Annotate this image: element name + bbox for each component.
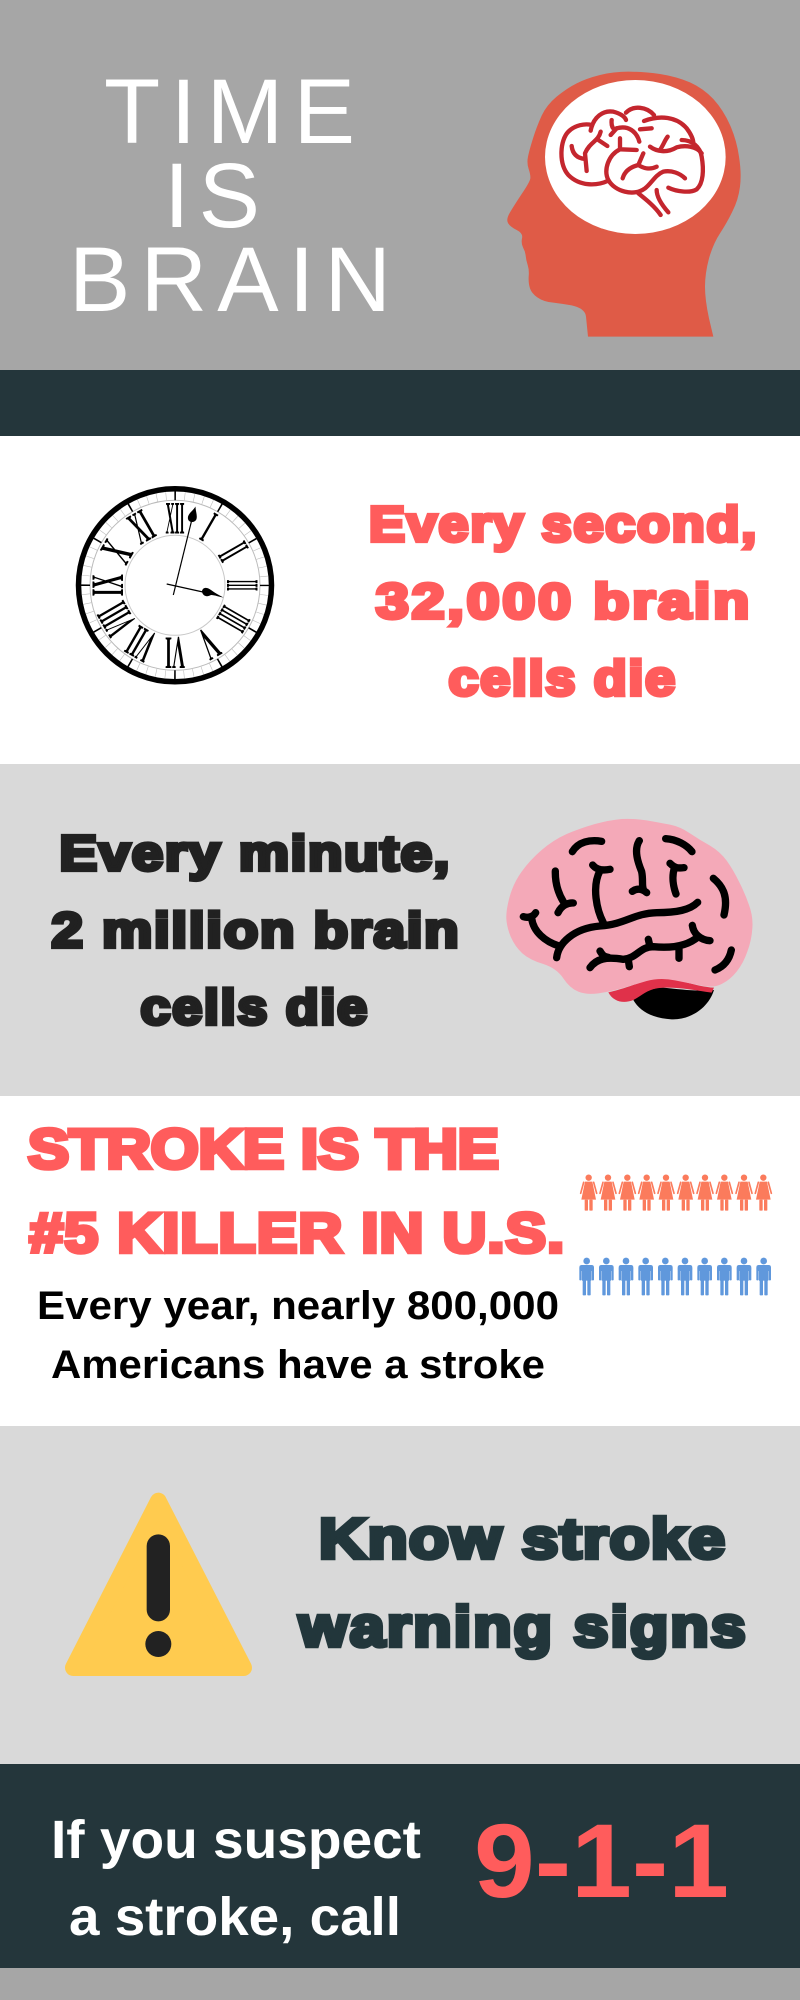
icon: roman numeral clock: XI: [120, 500, 163, 555]
text: if you suspect: a stroke, call: [69, 1887, 401, 1947]
title: BRAIN: [69, 229, 391, 331]
text: every second: [369, 496, 756, 705]
text: every minute: 2 million brain: [52, 903, 459, 958]
title: IS: [164, 145, 260, 247]
icon: roman numeral clock: [78, 489, 272, 682]
icon: roman numeral clock: VI: [165, 626, 185, 678]
icon: roman numeral clock: X: [90, 532, 144, 572]
text: every year: Every year, nearly 800,000: [37, 1284, 559, 1328]
title: [69, 61, 391, 331]
text: every second: 32,000 brain: [376, 575, 749, 629]
icon: roman numeral clock: XII: [166, 492, 184, 544]
icon: roman numeral clock: I: [193, 503, 224, 551]
text: every second: Every second,: [369, 496, 756, 551]
text: know stroke warning signs: [298, 1507, 746, 1658]
text: every minute: cells die: [140, 979, 367, 1034]
icon: roman numeral clock: IIII: [206, 598, 260, 639]
panel: every minute: [0, 764, 800, 1096]
text: if you suspect: If you suspect: [51, 1810, 421, 1870]
panel: every second: [0, 436, 800, 764]
panel: dark band: [0, 370, 800, 436]
text: every year: [37, 1284, 559, 1387]
heading: stroke killer: [28, 1119, 564, 1264]
icon: pink brain: [506, 819, 753, 1019]
icon: warning triangle: [73, 1501, 244, 1668]
icon: roman numeral clock: II: [208, 534, 258, 569]
text: every year: Americans have a stroke: [51, 1343, 545, 1387]
callout: 9-1-1: 9-1-1: [474, 1803, 729, 1920]
heading: stroke killer: #5 KILLER IN U.S.: [30, 1202, 564, 1264]
text: know stroke warning signs: warning signs: [298, 1595, 746, 1658]
panel: warning signs: [0, 1426, 800, 1764]
text: know stroke warning signs: Know stroke: [319, 1507, 725, 1571]
panel: call 911 footer: [0, 1764, 800, 1968]
icon: head with brain: [507, 72, 741, 337]
text: every second: cells die: [448, 650, 675, 705]
panel: bottom strip: [0, 1968, 800, 2000]
heading: stroke killer: STROKE IS THE: [28, 1119, 499, 1180]
icon: roman numeral clock: V: [189, 617, 228, 670]
icon: roman numeral clock: IX: [82, 574, 134, 596]
panel: title header: [0, 0, 800, 370]
icon: roman numeral clock: VIII: [87, 594, 146, 644]
text: every minute: [52, 826, 459, 1034]
title: TIME: [104, 61, 355, 163]
icon: row of men: [579, 1258, 771, 1295]
text: if you suspect: [51, 1810, 421, 1947]
icon: roman numeral clock: III: [216, 580, 268, 591]
icon: row of women: [581, 1174, 771, 1211]
text: every minute: Every minute,: [60, 826, 449, 881]
panel: stroke is the #5 killer: [0, 1096, 800, 1426]
icon: roman numeral clock: VII: [118, 615, 165, 672]
